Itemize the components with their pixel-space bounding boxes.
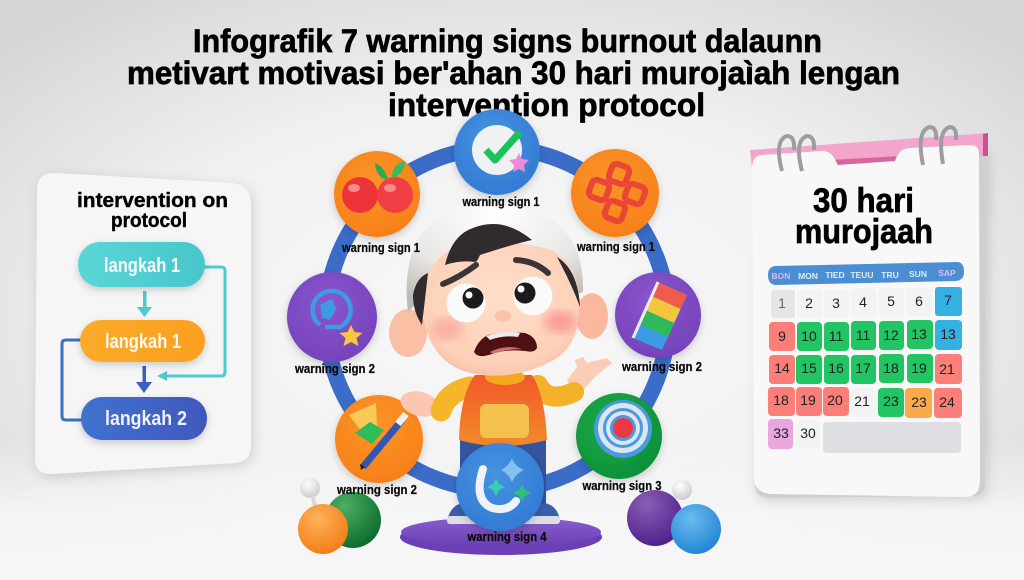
- ring: [326, 148, 668, 490]
- row 4: 23: [911, 394, 927, 410]
- row 1: 3: [832, 295, 840, 311]
- row 3: 15: [801, 360, 817, 376]
- nose: [495, 310, 511, 322]
- badge: apples: [334, 151, 420, 237]
- calendar pink binding: [750, 133, 988, 168]
- row 2: 13: [940, 326, 956, 342]
- warning sign labels: warning sign 4: [467, 530, 547, 544]
- row 4: 23: [883, 393, 899, 409]
- calendar weekday header: [768, 262, 964, 285]
- illustration: base: [400, 517, 602, 555]
- mouth: [474, 332, 537, 356]
- calendar weekday header: BON: [772, 271, 790, 281]
- arrow: teal down: [137, 291, 152, 317]
- warning sign labels: warning sign 3: [582, 479, 662, 493]
- row 5: 30: [800, 425, 816, 441]
- left arm and hand: [398, 387, 470, 421]
- collar: [485, 369, 525, 385]
- title: [127, 23, 900, 123]
- panel heading: protocol: [111, 209, 187, 232]
- pocket: [480, 404, 529, 438]
- badge: shapes and pencil: [335, 395, 423, 483]
- connector: blue loop: [62, 340, 83, 420]
- connector: teal loop arrow: [157, 267, 225, 381]
- illustration: warning signs wheel: [287, 109, 721, 555]
- calendar weekday header: TEUU: [850, 270, 874, 280]
- ears: [389, 309, 427, 357]
- calendar title: murojaah: [795, 213, 933, 251]
- arrow: blue down: [136, 366, 152, 393]
- badge: checkmark: [454, 109, 540, 195]
- row 5: 33: [773, 425, 789, 441]
- right arm and hand: [538, 357, 612, 397]
- calendar weekday header: MON: [798, 271, 818, 281]
- title: Infografik 7 warning signs burnout dalaunn: [193, 23, 822, 59]
- badge: red squares: [571, 149, 659, 237]
- panel heading: [77, 189, 228, 232]
- warning sign labels: warning sign 2: [294, 362, 375, 376]
- warning sign labels: warning sign 1: [341, 241, 420, 255]
- row 2: 13: [911, 326, 927, 342]
- row 4: 18: [773, 392, 789, 408]
- warning sign labels: warning sign 2: [336, 483, 417, 497]
- row 3: 14: [774, 360, 790, 376]
- calendar back page: [755, 150, 987, 498]
- blush: [431, 318, 463, 340]
- calendar weekday header: TIED: [825, 270, 845, 280]
- row 3: 18: [883, 360, 899, 376]
- warning sign labels: [294, 195, 702, 544]
- row 1: 5: [887, 293, 895, 309]
- decorative balls right: [627, 480, 721, 554]
- panel heading: intervention on: [77, 189, 228, 212]
- eyes: [446, 276, 552, 322]
- row 3: [769, 354, 962, 384]
- calendar page: [752, 145, 980, 497]
- row 1: 7: [944, 292, 952, 308]
- row 4: 21: [854, 393, 870, 409]
- row 2: 11: [829, 328, 843, 344]
- row 3: 17: [855, 360, 871, 376]
- panel: intervention protocol: [35, 173, 251, 474]
- calendar rings: [779, 127, 956, 171]
- row 1: 1: [778, 295, 786, 311]
- row 1: 6: [915, 293, 923, 309]
- calendar weekday header: SUN: [909, 269, 927, 279]
- head: [422, 242, 579, 376]
- hair: [413, 224, 580, 325]
- step pill 1: langkah 1: [104, 255, 180, 277]
- row 2: 10: [801, 328, 817, 344]
- badge: target: [576, 393, 662, 479]
- title: metivart motivasi ber'ahan 30 hari murojaìah lengan: [127, 55, 900, 91]
- torso: [459, 375, 547, 446]
- row 2: [769, 320, 962, 351]
- badge: moon and sparkles: [456, 443, 544, 531]
- calendar title: [795, 182, 933, 251]
- row 3: 21: [939, 361, 955, 377]
- row 1: 4: [859, 294, 867, 310]
- step pill 2: [80, 320, 205, 362]
- illustration: shoes: [447, 503, 560, 524]
- eyebrows: [443, 260, 548, 284]
- warning sign labels: warning sign 1: [576, 240, 655, 254]
- row 4: [768, 387, 962, 418]
- row 3: 16: [828, 360, 844, 376]
- calendar title: 30 hari: [813, 182, 914, 220]
- title: intervention protocol: [388, 87, 705, 123]
- row 4: 19: [800, 392, 816, 408]
- badge: ruler: [615, 272, 701, 358]
- row 2: 9: [778, 328, 786, 344]
- decorative balls left: [298, 478, 381, 554]
- warning sign labels: warning sign 2: [621, 360, 702, 374]
- character: [389, 205, 612, 508]
- calendar grid: [768, 287, 962, 453]
- legs: [460, 436, 546, 508]
- row 2: 12: [883, 327, 899, 343]
- panel: calendar: [750, 127, 988, 498]
- cap: [407, 205, 583, 312]
- badge: purple swirl: [287, 272, 377, 362]
- row 4: 24: [939, 394, 955, 410]
- step pill 1: [78, 242, 205, 287]
- row 5: [768, 419, 961, 453]
- row 1: 2: [805, 295, 813, 311]
- step pill 3: langkah 2: [105, 408, 187, 430]
- warning sign labels: warning sign 1: [462, 195, 540, 209]
- step pill 2: langkah 1: [105, 331, 181, 353]
- row 1: [771, 287, 962, 318]
- row 4: 20: [827, 392, 843, 408]
- row 2: 11: [856, 327, 870, 343]
- calendar weekday header: TRU: [881, 270, 899, 280]
- step pill 3: [81, 397, 207, 440]
- calendar weekday header: SAP: [938, 268, 956, 278]
- row 3: 19: [911, 360, 927, 376]
